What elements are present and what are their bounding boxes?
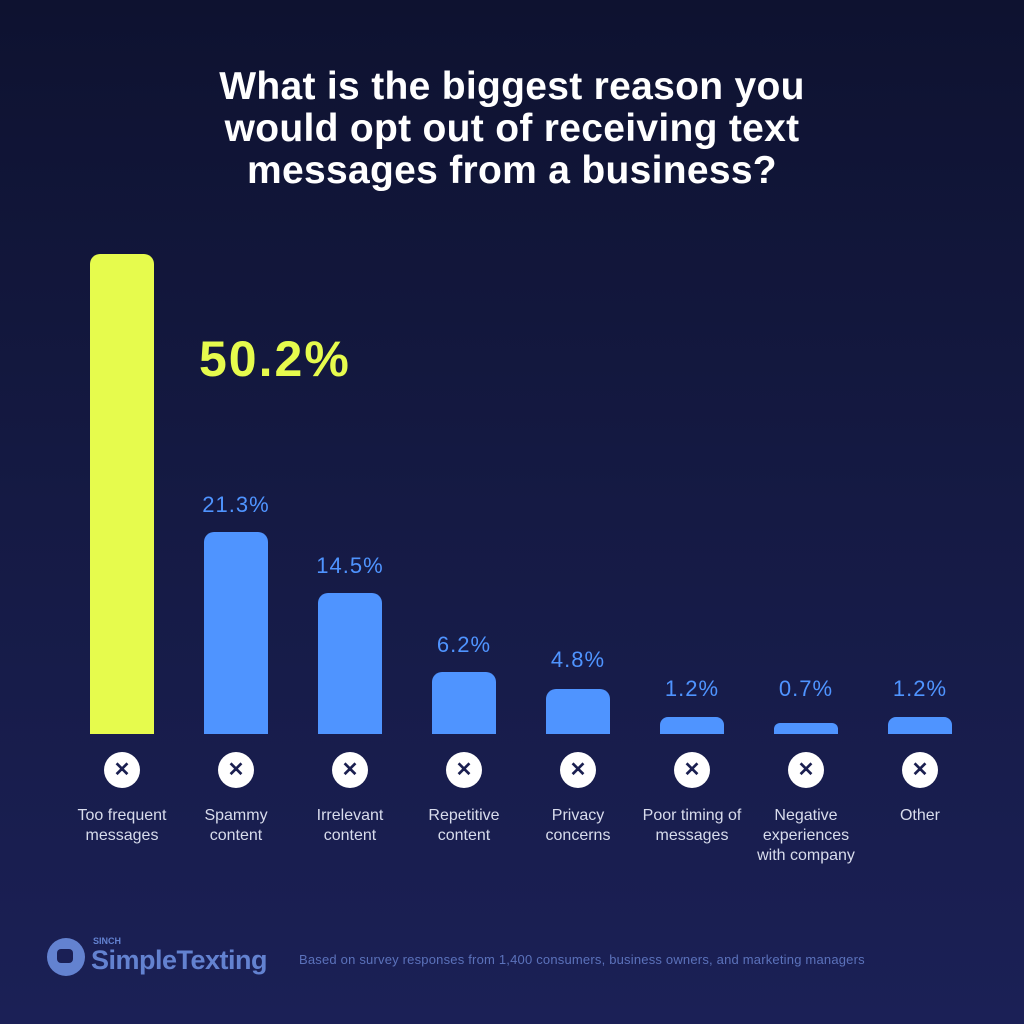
label: content <box>438 827 490 844</box>
icon x <box>674 752 710 788</box>
icon x <box>788 752 824 788</box>
icon x: ✕ <box>342 759 358 781</box>
title: messages from a business? <box>247 149 777 192</box>
icon x: ✕ <box>456 759 472 781</box>
icon x: ✕ <box>798 759 814 781</box>
icon x: ✕ <box>570 759 586 781</box>
label: content <box>324 827 376 844</box>
label: experiences <box>763 827 849 844</box>
label: Privacy <box>552 807 604 824</box>
label <box>428 807 500 844</box>
icon x: ✕ <box>912 759 928 781</box>
bar: privacy <box>546 689 610 734</box>
label <box>546 807 610 844</box>
icon x <box>902 752 938 788</box>
category labels <box>78 807 940 864</box>
title <box>219 65 805 192</box>
icon x: ✕ <box>228 759 244 781</box>
logo: SimpleTexting <box>91 945 267 975</box>
title: What is the biggest reason you <box>219 65 805 108</box>
value 1.2: 1.2% <box>665 676 719 701</box>
icon x: ✕ <box>114 759 130 781</box>
icon x <box>104 752 140 788</box>
label: Repetitive <box>428 807 500 824</box>
label <box>204 807 268 844</box>
value 14.5: 14.5% <box>316 553 384 578</box>
value 6.2: 6.2% <box>437 632 491 657</box>
label: with company <box>757 847 855 864</box>
bar: poor timing <box>660 717 724 734</box>
icon x <box>218 752 254 788</box>
value 50.2%: 50.2% <box>199 331 351 387</box>
label: Other <box>900 807 940 824</box>
value 4.8: 4.8% <box>551 647 605 672</box>
bar: repetitive <box>432 672 496 734</box>
bar: irrelevant <box>318 593 382 734</box>
label: Irrelevant <box>317 807 383 824</box>
logo: SINCH <box>93 936 121 946</box>
icon: chat bubble <box>47 938 85 976</box>
label: Poor timing of messages <box>643 807 741 844</box>
bar: other <box>888 717 952 734</box>
bar: too frequent <box>90 254 154 734</box>
label: Too frequent messages <box>78 807 166 844</box>
label: Negative <box>774 807 838 824</box>
label <box>317 807 384 844</box>
icon x <box>560 752 596 788</box>
label: content <box>210 827 262 844</box>
value 1.2 other: 1.2% <box>893 676 947 701</box>
label: Spammy <box>204 807 268 824</box>
label <box>757 807 855 864</box>
title: would opt out of receiving text <box>225 107 799 150</box>
value 0.7: 0.7% <box>779 676 833 701</box>
value 21.3: 21.3% <box>202 492 270 517</box>
bar chart <box>90 254 952 734</box>
bar: negative <box>774 723 838 734</box>
logo <box>47 936 267 976</box>
icon x <box>446 752 482 788</box>
label: concerns <box>546 827 610 844</box>
footer note: Based on survey responses from 1,400 consumers, business owners, and marketing managers <box>299 952 865 967</box>
bar: spammy <box>204 532 268 734</box>
icons row <box>104 752 938 788</box>
icon x <box>332 752 368 788</box>
icon x: ✕ <box>684 759 700 781</box>
